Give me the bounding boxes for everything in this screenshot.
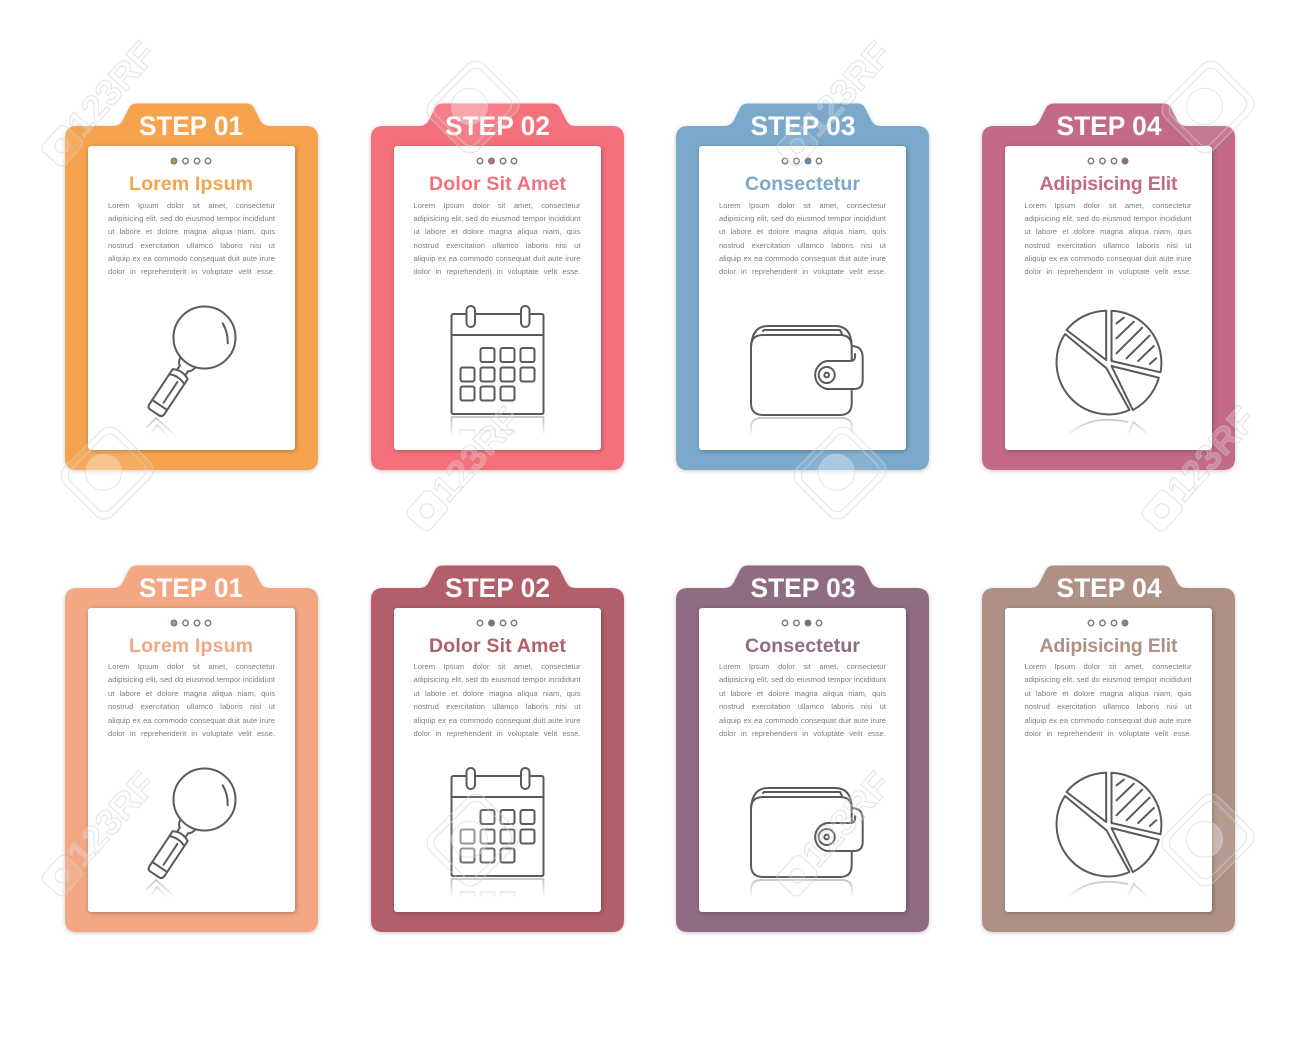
body text <box>414 200 580 276</box>
body text: nostrud exercitation ullamco laboris nisi ut <box>1024 241 1192 250</box>
body text: aliquip ex ea commodo consequat duit aute irure <box>719 716 886 725</box>
watermark: logo mid right <box>1134 399 1264 536</box>
body text: adipisicing elit, sed do eiusmod tempor incididunt <box>414 214 580 223</box>
watermark: logo top middle <box>769 34 899 171</box>
body text: dolor in reprehenderit in voluptate velit esse. <box>719 729 886 738</box>
heading: Consectetur <box>745 173 860 195</box>
step label: STEP 02 <box>444 111 550 141</box>
progress dots <box>477 620 516 625</box>
body text: ut labore et dolore magna aliqua niam, quis <box>1024 689 1192 698</box>
heading: Lorem Ipsum <box>129 173 253 195</box>
body text: aliquip ex ea commodo consequat duit aute irure <box>1024 254 1192 263</box>
watermark: logo mid left <box>399 399 529 536</box>
watermark: camera 3 <box>789 422 891 524</box>
watermark: logo top left <box>34 34 164 171</box>
watermark: camera 4 <box>1157 56 1259 158</box>
step label: STEP 02 <box>444 572 550 602</box>
watermark: logo bottom left: 123RF <box>58 764 164 874</box>
step label: STEP 04 <box>1056 572 1161 602</box>
heading: Adipisicing Elit <box>1039 634 1178 656</box>
body text: aliquip ex ea commodo consequat duit aute irure <box>108 254 275 263</box>
icon: calendar <box>451 768 543 896</box>
step label: STEP 03 <box>750 572 856 602</box>
body text: nostrud exercitation ullamco laboris nisi ut <box>108 241 275 250</box>
body text: aliquip ex ea commodo consequat duit aute irure <box>719 254 886 263</box>
panel: step 03 blue <box>674 102 931 473</box>
watermark: logo mid right: 123RF <box>1158 399 1264 509</box>
watermark: logo top middle: 123RF <box>793 34 899 144</box>
step label: STEP 01 <box>139 572 243 602</box>
progress dots <box>477 158 516 164</box>
body text <box>1024 200 1192 276</box>
progress dots <box>171 158 211 164</box>
watermark: logo bottom middle <box>769 764 899 901</box>
body text: Lorem Ipsum dolor sit amet, consectetur <box>108 662 275 671</box>
watermark: camera 5 <box>422 789 524 891</box>
panel: step 01 peach <box>63 564 320 935</box>
step label: STEP 03 <box>750 111 856 141</box>
body text: ut labore et dolore magna aliqua niam, quis <box>414 689 580 698</box>
heading: Consectetur <box>745 634 860 656</box>
body text: ut labore et dolore magna aliqua niam, quis <box>719 689 886 698</box>
body text <box>719 200 886 276</box>
body text: adipisicing elit, sed do eiusmod tempor incididunt <box>719 214 886 223</box>
watermark: logo mid left: 123RF <box>423 399 529 509</box>
body text: ut labore et dolore magna aliqua niam, quis <box>108 227 275 236</box>
body text: nostrud exercitation ullamco laboris nisi ut <box>108 702 275 711</box>
heading: Dolor Sit Amet <box>428 173 566 195</box>
panel: step 02 crimson <box>369 564 626 935</box>
body text: nostrud exercitation ullamco laboris nisi ut <box>414 702 580 711</box>
body text: aliquip ex ea commodo consequat duit aute irure <box>108 716 275 725</box>
panel: step 04 taupe <box>980 564 1237 935</box>
body text: ut labore et dolore magna aliqua niam, quis <box>719 227 886 236</box>
body text: Lorem Ipsum dolor sit amet, consectetur <box>414 200 580 210</box>
body text: Lorem Ipsum dolor sit amet, consectetur <box>414 662 580 671</box>
watermark: logo bottom middle: 123RF <box>793 764 899 874</box>
body text: dolor in reprehenderit in voluptate velit esse. <box>1024 729 1192 738</box>
body text: nostrud exercitation ullamco laboris nisi ut <box>414 241 580 250</box>
body text: ut labore et dolore magna aliqua niam, quis <box>414 227 580 236</box>
body text: Lorem Ipsum dolor sit amet, consectetur <box>1024 200 1192 210</box>
body text <box>108 200 275 276</box>
step label: STEP 04 <box>1056 111 1161 141</box>
body text: ut labore et dolore magna aliqua niam, quis <box>1024 227 1192 236</box>
watermark: camera 1 <box>56 422 158 524</box>
progress dots <box>171 620 211 625</box>
body text: adipisicing elit, sed do eiusmod tempor incididunt <box>108 214 275 223</box>
heading: Adipisicing Elit <box>1039 173 1178 195</box>
body text: dolor in reprehenderit in voluptate velit esse. <box>1024 267 1192 276</box>
body text: adipisicing elit, sed do eiusmod tempor incididunt <box>108 675 275 684</box>
body text: adipisicing elit, sed do eiusmod tempor incididunt <box>719 675 886 684</box>
body text: dolor in reprehenderit in voluptate velit esse. <box>414 267 580 276</box>
panel: step 04 plum <box>980 102 1237 473</box>
heading: Dolor Sit Amet <box>428 634 566 656</box>
icon: calendar <box>451 306 543 435</box>
body text: dolor in reprehenderit in voluptate velit esse. <box>108 267 275 276</box>
body text: Lorem Ipsum dolor sit amet, consectetur <box>108 200 275 210</box>
body text: Lorem Ipsum dolor sit amet, consectetur <box>719 200 886 210</box>
panel: step 01 orange <box>63 102 320 473</box>
body text: adipisicing elit, sed do eiusmod tempor incididunt <box>1024 214 1192 223</box>
watermark: camera 2 <box>422 56 524 158</box>
icon: pie chart <box>1056 311 1161 435</box>
body text <box>719 662 886 738</box>
step label: STEP 01 <box>139 111 243 141</box>
panel: step 02 red <box>369 102 626 473</box>
watermark: logo bottom left <box>34 764 164 901</box>
icon: wallet <box>751 326 863 433</box>
progress dots <box>1088 620 1127 625</box>
progress dots <box>1088 158 1127 164</box>
body text <box>414 662 580 738</box>
body text: nostrud exercitation ullamco laboris nisi ut <box>719 702 886 711</box>
watermark: logo top left: 123RF <box>58 34 164 144</box>
body text: nostrud exercitation ullamco laboris nisi ut <box>719 241 886 250</box>
body text: adipisicing elit, sed do eiusmod tempor incididunt <box>1024 675 1192 684</box>
body text: ut labore et dolore magna aliqua niam, quis <box>108 689 275 698</box>
body text: aliquip ex ea commodo consequat duit aute irure <box>1024 716 1192 725</box>
body text: dolor in reprehenderit in voluptate velit esse. <box>108 729 275 738</box>
progress dots <box>782 620 822 625</box>
body text: aliquip ex ea commodo consequat duit aute irure <box>414 716 580 725</box>
heading: Lorem Ipsum <box>129 634 253 656</box>
body text: Lorem Ipsum dolor sit amet, consectetur <box>1024 662 1192 671</box>
body text: aliquip ex ea commodo consequat duit aute irure <box>414 254 580 263</box>
progress dots <box>782 158 822 164</box>
icon: magnifying glass <box>147 768 236 898</box>
body text: nostrud exercitation ullamco laboris nisi ut <box>1024 702 1192 711</box>
icon: wallet <box>751 788 863 894</box>
body text <box>108 662 275 738</box>
body text: dolor in reprehenderit in voluptate velit esse. <box>414 729 580 738</box>
body text: dolor in reprehenderit in voluptate velit esse. <box>719 267 886 276</box>
body text <box>1024 662 1192 738</box>
icon: magnifying glass <box>147 306 236 436</box>
panel: step 03 mauve <box>674 564 931 935</box>
body text: Lorem Ipsum dolor sit amet, consectetur <box>719 662 886 671</box>
watermark: camera 6 <box>1157 789 1259 891</box>
icon: pie chart <box>1056 772 1161 896</box>
body text: adipisicing elit, sed do eiusmod tempor incididunt <box>414 675 580 684</box>
